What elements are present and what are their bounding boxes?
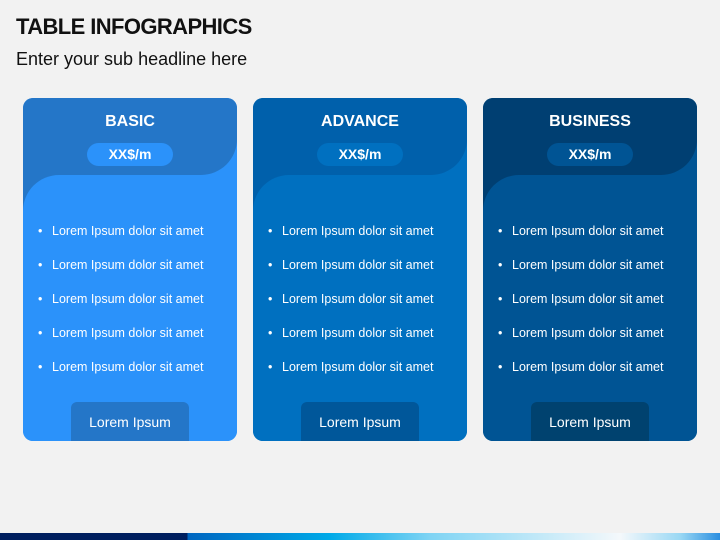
business list [483, 175, 697, 441]
panel: advance: Lorem Ipsum dolor sit amet [282, 326, 433, 340]
title: TABLE INFOGRAPHICS [16, 14, 252, 39]
advance button [301, 402, 419, 441]
panel: basic: Lorem Ipsum dolor sit amet [52, 360, 203, 374]
panel: business: Lorem Ipsum dolor sit amet [512, 292, 663, 306]
panel: basic: Lorem Ipsum dolor sit amet [52, 326, 203, 340]
business header: BUSINESS [549, 113, 631, 130]
panel: advance [253, 98, 467, 441]
basic list [23, 175, 237, 441]
basic button [71, 402, 189, 441]
subtitle: Enter your sub headline here [16, 49, 247, 69]
advance list [253, 175, 467, 441]
panel: business: Lorem Ipsum dolor sit amet [512, 258, 663, 272]
basic header: BASIC [105, 113, 155, 130]
advance header: ADVANCE [321, 113, 399, 130]
panel: advance: Lorem Ipsum dolor sit amet [282, 258, 433, 272]
business header: XX$/m [569, 146, 611, 162]
basic header: XX$/m [109, 146, 151, 162]
panel: basic: Lorem Ipsum dolor sit amet [52, 258, 203, 272]
bottom bar [0, 533, 720, 540]
advance button: Lorem Ipsum [319, 414, 401, 430]
advance header [253, 98, 467, 175]
business button [531, 402, 649, 441]
business button: Lorem Ipsum [549, 414, 631, 430]
panel: advance: Lorem Ipsum dolor sit amet [282, 292, 433, 306]
panel: business: Lorem Ipsum dolor sit amet [512, 360, 663, 374]
panel: basic: Lorem Ipsum dolor sit amet [52, 224, 203, 238]
basic header [23, 98, 237, 175]
panel: advance: Lorem Ipsum dolor sit amet [282, 360, 433, 374]
business header [483, 98, 697, 175]
panel: basic: Lorem Ipsum dolor sit amet [52, 292, 203, 306]
panel: business: Lorem Ipsum dolor sit amet [512, 326, 663, 340]
basic button: Lorem Ipsum [89, 414, 171, 430]
advance header: XX$/m [339, 146, 381, 162]
panel: basic [23, 98, 237, 441]
panel: advance: Lorem Ipsum dolor sit amet [282, 224, 433, 238]
panel: business [483, 98, 697, 441]
panel: business: Lorem Ipsum dolor sit amet [512, 224, 663, 238]
